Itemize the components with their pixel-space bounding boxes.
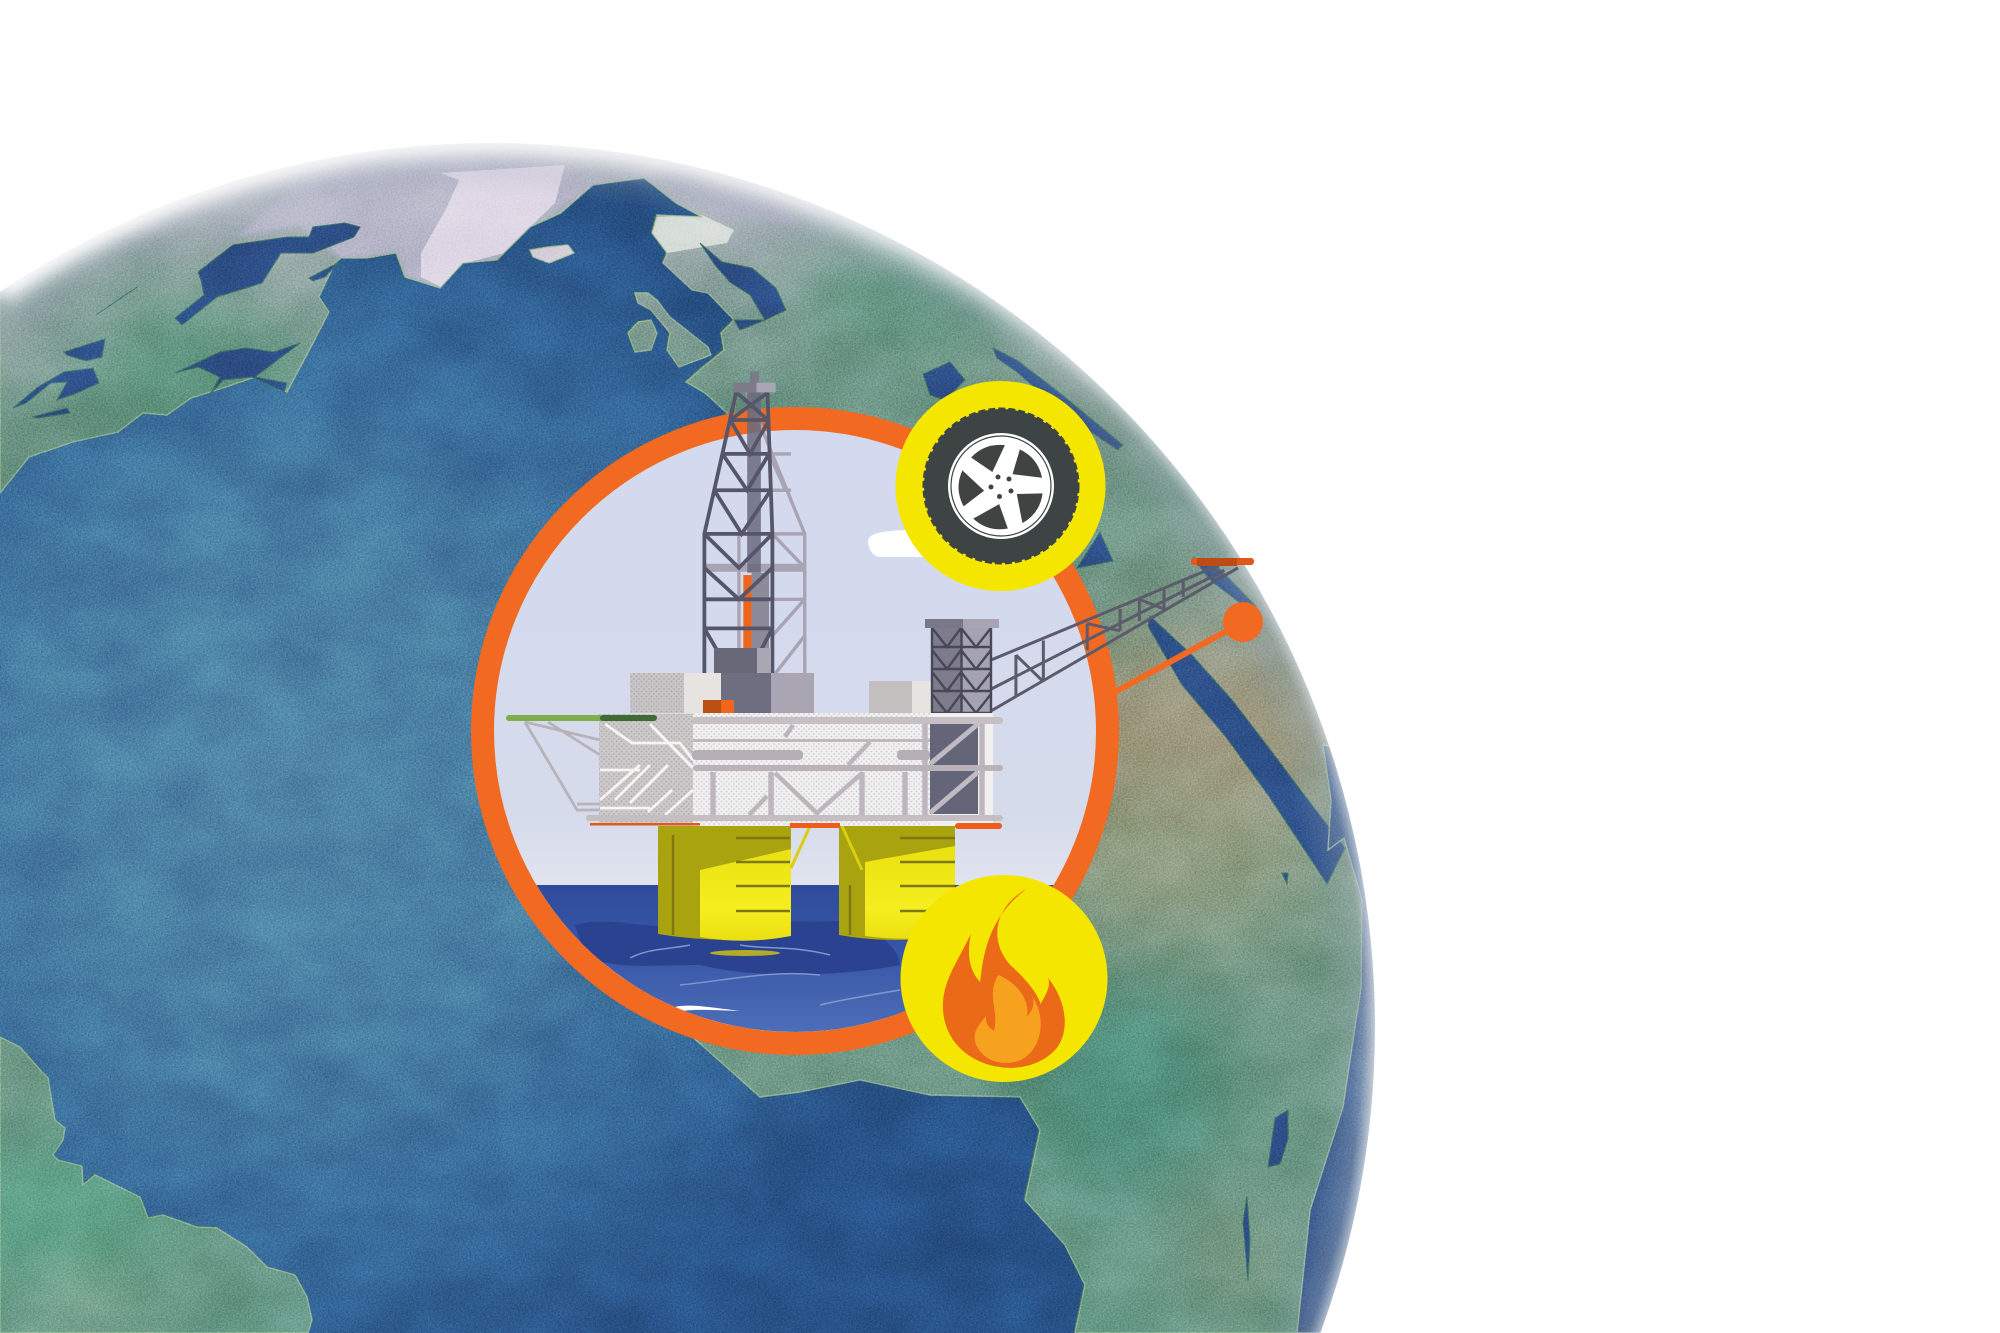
globe bbox=[0, 143, 1375, 1333]
main deck bbox=[586, 713, 1003, 829]
icon: tire badge bbox=[896, 381, 1106, 591]
flame bbox=[943, 889, 1065, 1068]
derrick tower bbox=[704, 372, 805, 674]
globe: land masses bbox=[0, 143, 1362, 1333]
cloud bbox=[868, 530, 930, 557]
crane tower bbox=[925, 619, 999, 713]
helideck frame bbox=[525, 722, 660, 810]
ice: arctic and Greenland bbox=[240, 165, 794, 288]
globe: ocean bbox=[0, 178, 1084, 1333]
crane boom bbox=[991, 565, 1238, 711]
left module bbox=[599, 714, 693, 824]
inset: ring and sky bbox=[480, 418, 1120, 1045]
globe: upper haze bbox=[0, 143, 1138, 435]
sea and waves bbox=[536, 885, 1054, 1032]
rim bbox=[948, 433, 1054, 539]
crane tip bbox=[1191, 558, 1254, 566]
globe: inland seas and lakes bbox=[13, 223, 1345, 1281]
helideck top bbox=[506, 715, 657, 721]
globe: ocean and land texture bbox=[0, 100, 1400, 1333]
oil platform bbox=[506, 372, 1254, 941]
globe: atmospheric edge bbox=[0, 100, 1400, 1333]
orange ring bbox=[482, 418, 1108, 1044]
icon: flame badge bbox=[900, 875, 1108, 1082]
derrick: front frame bbox=[704, 392, 772, 674]
deck machinery blocks bbox=[630, 648, 931, 713]
derrick: back frame bbox=[704, 392, 805, 674]
pontoons bbox=[658, 826, 955, 941]
globe: Indian Ocean limb bbox=[1296, 744, 1375, 1333]
tire bbox=[924, 409, 1078, 563]
sky bbox=[490, 426, 1100, 1036]
derrick: crown block bbox=[733, 372, 776, 392]
leader line and dot bbox=[1115, 602, 1263, 692]
derrick: centre column bbox=[747, 392, 761, 573]
